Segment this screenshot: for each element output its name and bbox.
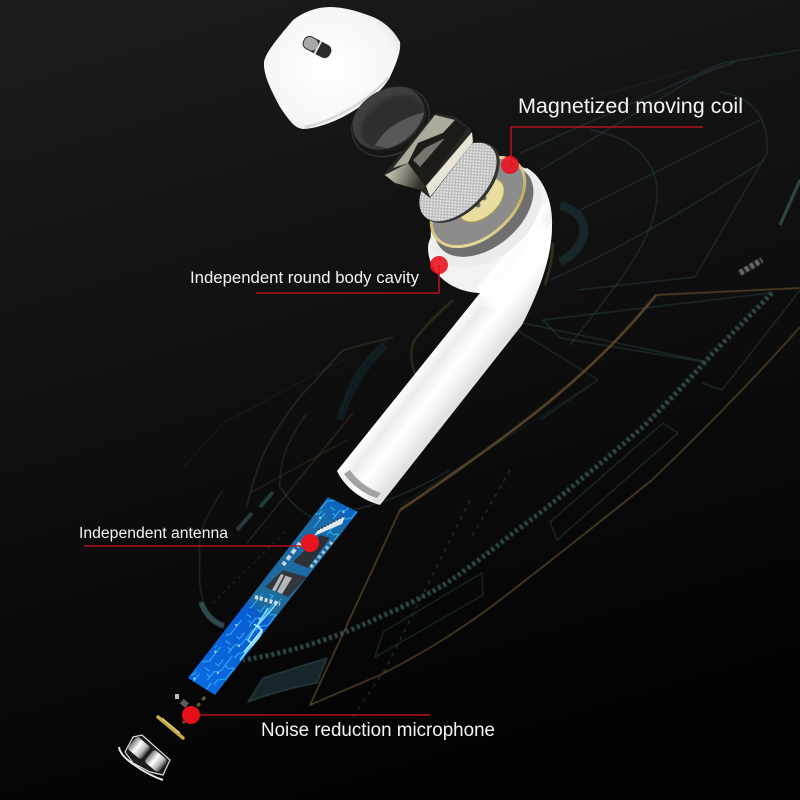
metal connector	[119, 735, 170, 780]
stem opening	[344, 470, 381, 498]
callout: magnetized moving coil: Magnetized moving coil	[518, 95, 743, 118]
chip row top	[314, 516, 345, 536]
callout: independent round body cavity	[190, 256, 448, 293]
translucent lens	[339, 73, 442, 171]
dotted teal arc	[243, 293, 772, 660]
right pins	[310, 542, 332, 568]
gold ring	[414, 140, 542, 264]
grey cavity	[417, 147, 551, 275]
callout: noise reduction microphone: Noise reduction microphone	[261, 720, 495, 741]
gold coil	[450, 169, 512, 231]
metal block	[383, 113, 473, 198]
earbud body with stem	[337, 140, 561, 505]
sound port	[300, 34, 334, 60]
circuit traces	[188, 497, 358, 695]
teal filled accents	[248, 658, 327, 702]
circuit board antenna	[188, 497, 358, 695]
mesh disc	[405, 127, 514, 237]
processor chip	[293, 535, 330, 568]
microphone parts	[158, 694, 205, 738]
left pins	[283, 543, 300, 565]
background tech line art	[183, 50, 800, 720]
callout: magnetized moving coil	[501, 95, 743, 174]
callout: independent antenna	[79, 525, 319, 552]
outer cavity rim	[411, 143, 561, 289]
ear tip cap	[264, 7, 400, 129]
dual chip	[265, 570, 307, 597]
callout: noise reduction microphone	[182, 706, 495, 741]
component row	[255, 597, 280, 604]
callout: independent round body cavity: Independent round body cavity	[190, 269, 420, 287]
callout: independent antenna: Independent antenna	[79, 525, 228, 542]
